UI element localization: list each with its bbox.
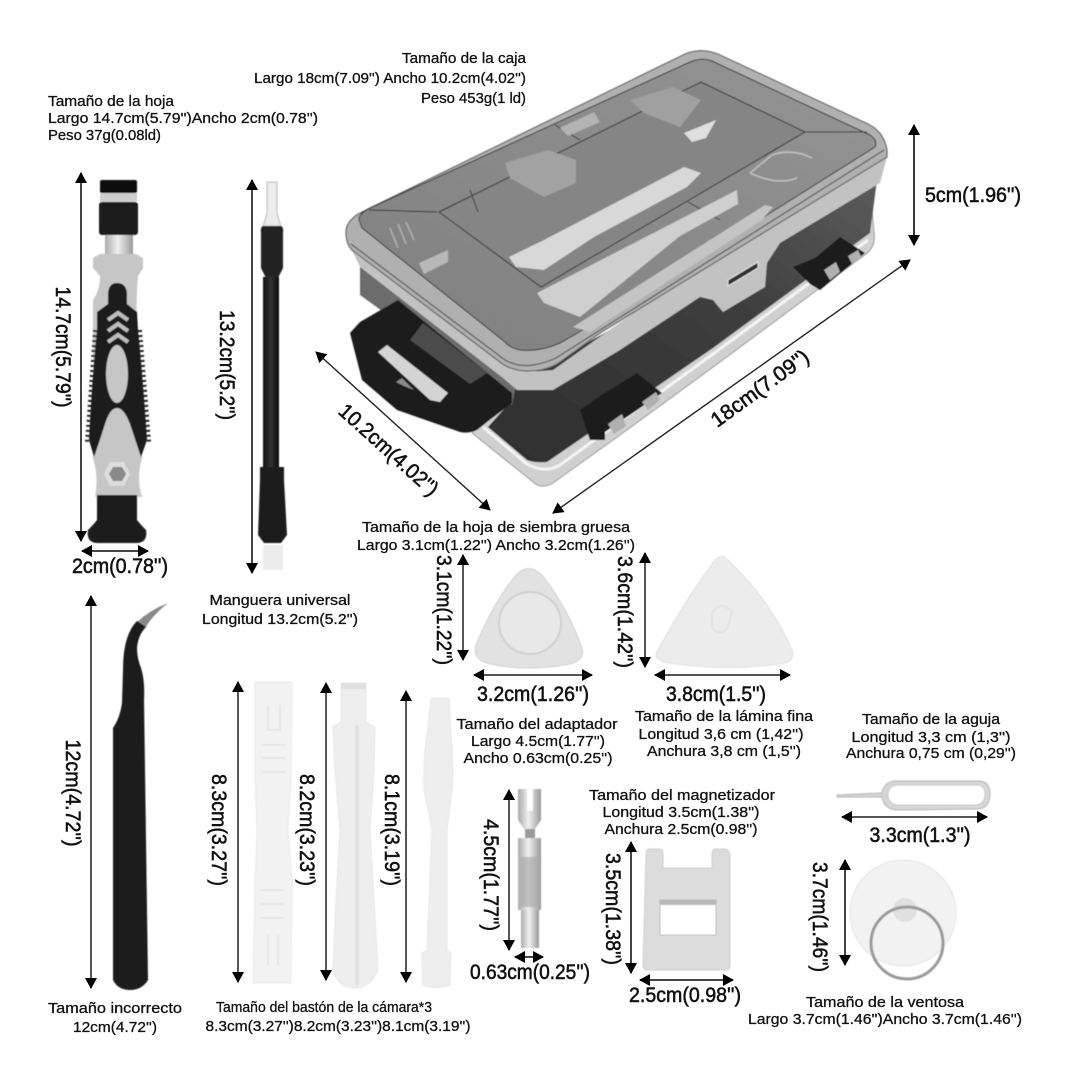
hex centre bbox=[109, 467, 126, 481]
dimension: round pick width: 3.2cm(1.26'') bbox=[477, 683, 589, 706]
dimension: box height: 5cm(1.96'') bbox=[925, 184, 1021, 207]
caption: needle: Tamaño de la aguja bbox=[862, 711, 1001, 728]
inner tool: small adaptor bbox=[419, 250, 448, 274]
photo: SIM needle bbox=[837, 781, 990, 810]
adapter shank bbox=[521, 910, 539, 948]
caption: box size: Tamaño de la caja bbox=[402, 50, 527, 67]
window corner lines bbox=[369, 125, 867, 220]
caption: magnetizer bbox=[589, 787, 775, 838]
photo: tweezers bbox=[113, 603, 168, 990]
hex badge bbox=[104, 462, 130, 486]
dimension: box height bbox=[914, 125, 1021, 245]
dimension: handle width: 2cm(0.78'') bbox=[72, 555, 168, 578]
dimension: sheet height bbox=[613, 553, 645, 668]
caption: thin sheet bbox=[635, 708, 814, 760]
lid top surface bbox=[359, 59, 876, 350]
caption: thick pick size bbox=[357, 519, 635, 554]
upper hinges bbox=[793, 237, 865, 290]
sheet embossed mark bbox=[712, 606, 732, 633]
handle base bbox=[88, 495, 146, 543]
inner tool: small black tips bbox=[390, 222, 414, 248]
photo: flat pry tool bbox=[253, 682, 292, 983]
caption: tweezers: Tamaño incorrecto bbox=[48, 1000, 182, 1017]
lift tab bbox=[350, 300, 512, 433]
caption: needle bbox=[846, 711, 1016, 762]
caption: blade size: Largo 14.7cm(5.79'')Ancho 2cm(0.78'') bbox=[48, 110, 318, 127]
oval inlay bbox=[106, 345, 128, 403]
caption: adapter: Tamaño del adaptador bbox=[456, 716, 618, 733]
inner tool: upper screwdriver bbox=[630, 87, 701, 127]
adapter head bbox=[518, 789, 541, 829]
tab translucent band bbox=[410, 323, 487, 384]
cup knob bbox=[893, 898, 917, 922]
dimension: box length: 18cm(7.09'') bbox=[706, 345, 814, 432]
grip serration left bbox=[87, 330, 95, 442]
caption: needle: Anchura 0,75 cm (0,29'') bbox=[846, 745, 1016, 762]
chuck ring bbox=[100, 193, 137, 202]
caption: suction cup: Largo 3.7cm(1.46'')Ancho 3.7cm(1.46'') bbox=[748, 1011, 1022, 1028]
photo: plastic storage box bbox=[346, 51, 887, 486]
dimension: handle height: 14.7cm(5.79'') bbox=[51, 286, 74, 408]
light band under lid bbox=[347, 137, 887, 390]
adapter knurled body bbox=[518, 838, 541, 910]
photo: magnetizer bbox=[643, 849, 730, 970]
window shade bbox=[660, 900, 716, 905]
dimension: round pick height bbox=[432, 555, 463, 665]
caption: suction cup bbox=[748, 994, 1022, 1028]
caption: magnetizer: Tamaño del magnetizador bbox=[589, 787, 775, 804]
caption: thin sheet: Longitud 3,6 cm (1,42'') bbox=[638, 726, 804, 743]
upper hinge rollers bbox=[824, 250, 862, 280]
flex tube bbox=[263, 277, 279, 469]
caption: tweezers: 12cm(4.72'') bbox=[73, 1019, 157, 1036]
caption: camera wand: 8.3cm(3.27'')8.2cm(3.23'')8.1cm(3.19'') bbox=[206, 1018, 471, 1035]
lower grip bbox=[258, 467, 287, 543]
dimension: adapter length: 4.5cm(1.77'') bbox=[479, 819, 502, 931]
pry tool texture bbox=[260, 705, 286, 965]
inner tool: white spudger lower bbox=[537, 190, 738, 317]
dimension: magnetizer height: 3.5cm(1.38'') bbox=[601, 853, 624, 965]
caption: thin sheet: Anchura 3,8 cm (1,5'') bbox=[647, 743, 801, 760]
steel neck bbox=[105, 235, 133, 255]
upper knob bbox=[261, 226, 283, 278]
caption: universal hose: Manguera universal bbox=[210, 592, 350, 609]
bit chuck bbox=[100, 180, 137, 193]
photo: suction cup bbox=[850, 860, 956, 979]
clear tip bbox=[263, 182, 281, 226]
caption: thick pick size: Largo 3.1cm(1.22'') Ancho 3.2cm(1.26'') bbox=[357, 537, 635, 554]
dimension: needle width: 3.3cm(1.3'') bbox=[870, 824, 970, 847]
chevrons bbox=[108, 313, 128, 342]
dimension: sheet width: 3.8cm(1.5'') bbox=[666, 683, 766, 706]
dimension: tweezers length: 12cm(4.72'') bbox=[61, 740, 84, 846]
dimension: suction cup height: 3.7cm(1.46'') bbox=[808, 862, 831, 972]
photo: flexible hose bbox=[258, 182, 287, 570]
caption: thin sheet: Tamaño de la lámina fina bbox=[635, 708, 814, 725]
lid inner window bbox=[439, 82, 805, 287]
dimension: magnetizer width: 2.5cm(0.98'') bbox=[629, 984, 741, 1007]
caption: thick pick size: Tamaño de la hoja de siembra gruesa bbox=[362, 519, 631, 536]
inner tool: small bits bbox=[684, 120, 716, 142]
clear base rim bbox=[472, 185, 874, 486]
photo: screwdriver handle bbox=[87, 180, 149, 543]
spade ridge bbox=[356, 725, 358, 985]
white rim line bbox=[483, 240, 868, 469]
photo: spade pry tool bbox=[333, 683, 378, 988]
dimension: adapter width: 0.63cm(0.25'') bbox=[470, 961, 590, 984]
lid lip line bbox=[351, 150, 884, 366]
caption: suction cup: Tamaño de la ventosa bbox=[806, 994, 965, 1011]
dimension: pry tool 2: 8.2cm(3.23'') bbox=[295, 774, 318, 886]
inner tool: ring and pin bbox=[750, 152, 812, 181]
gray handle body bbox=[93, 254, 143, 497]
caption: magnetizer: Longitud 3.5cm(1.38'') bbox=[602, 804, 760, 821]
lower hinge rollers bbox=[608, 392, 660, 434]
dimension: suction cup height bbox=[808, 860, 845, 972]
dimension: box length bbox=[553, 260, 910, 513]
caption: needle: Longitud 3,3 cm (1,3'') bbox=[852, 729, 1010, 746]
caption: box size: Largo 18cm(7.09'') Ancho 10.2cm(4.02'') bbox=[254, 70, 526, 87]
caption: universal hose bbox=[202, 592, 358, 628]
metal ring bbox=[871, 907, 943, 979]
photo: round pick bbox=[475, 568, 583, 668]
caption: adapter bbox=[456, 716, 618, 767]
knurled collar bbox=[99, 202, 138, 235]
lid outer bbox=[346, 51, 887, 371]
caption: blade size: Tamaño de la hoja bbox=[48, 93, 175, 110]
adapter head slot bbox=[527, 789, 533, 811]
adapter neck bbox=[525, 829, 535, 838]
caption: blade size bbox=[48, 93, 318, 144]
dimension: round pick height: 3.1cm(1.22'') bbox=[432, 555, 455, 665]
caption: universal hose: Longitud 13.2cm(5.2'') bbox=[202, 611, 358, 628]
tab handle slot bbox=[378, 345, 448, 402]
knurl texture bbox=[520, 857, 539, 907]
tweezers body bbox=[113, 621, 148, 990]
caption: box size: Peso 453g(1 ld) bbox=[421, 90, 526, 107]
lower hinges bbox=[580, 373, 662, 440]
black grip bbox=[89, 283, 147, 457]
dimension: box width bbox=[316, 352, 490, 510]
spade top bbox=[341, 683, 366, 689]
caption: magnetizer: Anchura 2.5cm(0.98'') bbox=[604, 821, 758, 838]
dimension: sheet width bbox=[655, 675, 790, 706]
inner tool: bit strip bbox=[560, 112, 600, 136]
caption: blade size: Peso 37g(0.08ld) bbox=[48, 127, 161, 144]
dimension: hose length: 13.2cm(5.2'') bbox=[215, 310, 238, 420]
inner tool: screwdriver handle shadow bbox=[505, 150, 576, 197]
tab handle shadow bbox=[396, 378, 414, 390]
inner tool: long white screwdriver bbox=[509, 167, 701, 270]
caption: camera wand: Tamaño del bastón de la cámara*3 bbox=[216, 999, 432, 1016]
short left face bbox=[360, 262, 516, 405]
photo: narrow pry tool bbox=[422, 698, 453, 988]
dimension: box width: 10.2cm(4.02'') bbox=[334, 399, 443, 501]
photo: thin triangular sheet bbox=[656, 556, 793, 668]
photo: adapter bbox=[518, 789, 541, 948]
grip serration right bbox=[140, 330, 149, 442]
clasp slot bbox=[728, 262, 758, 286]
magnetizer window bbox=[660, 900, 716, 935]
inner tool: third spudger strip bbox=[573, 205, 773, 332]
dimension: pry tool 3: 8.1cm(3.19'') bbox=[380, 774, 403, 886]
white socket bbox=[263, 545, 283, 570]
caption: adapter: Ancho 0.63cm(0.25'') bbox=[464, 750, 612, 767]
pick disc bbox=[499, 592, 561, 654]
caption: tweezers bbox=[48, 1000, 182, 1036]
caption: camera wand bbox=[206, 999, 471, 1035]
tweezers steel tip bbox=[137, 603, 168, 627]
caption: box size bbox=[254, 50, 527, 107]
dimension: pry tool 1: 8.3cm(3.27'') bbox=[207, 774, 230, 886]
caption: adapter: Largo 4.5cm(1.77'') bbox=[471, 733, 605, 750]
dark long face bbox=[488, 180, 877, 462]
needle loop hole bbox=[888, 785, 985, 805]
dimension: sheet height: 3.6cm(1.42'') bbox=[613, 556, 636, 668]
